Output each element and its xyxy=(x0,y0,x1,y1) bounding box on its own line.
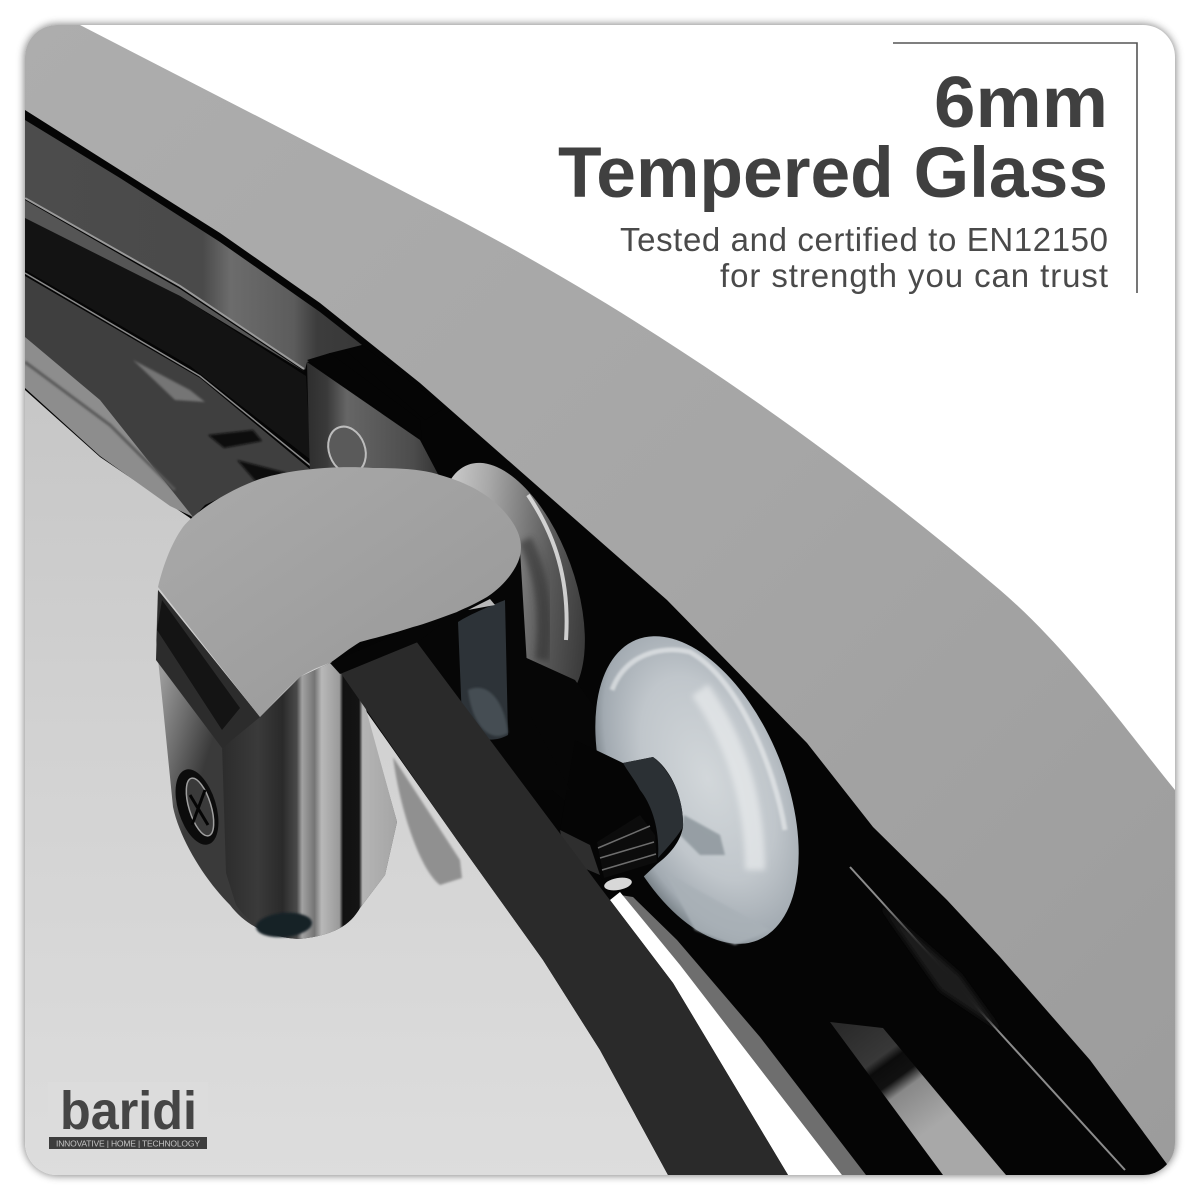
heading: Tempered Glass xyxy=(558,134,1108,213)
shower floor background xyxy=(25,380,725,1180)
rail reflection wedge xyxy=(133,360,205,402)
glass edge dark line xyxy=(25,362,175,490)
channel thin highlight line xyxy=(850,867,1125,1170)
logo: baridi: baridi xyxy=(60,1081,197,1141)
rail lower face xyxy=(25,276,311,518)
supporting text: for strength you can trust xyxy=(720,257,1108,294)
knob reflection on glass xyxy=(393,757,462,885)
glass edge strip xyxy=(25,337,193,517)
supporting text: Tested and certified to EN12150 xyxy=(620,221,1108,258)
face shine xyxy=(468,599,495,610)
heading xyxy=(558,63,1108,213)
logo: baridi: INNOVATIVE | HOME | TECHNOLOGY xyxy=(56,1138,200,1148)
black inner rail xyxy=(25,218,311,460)
channel dark upper sheen xyxy=(880,905,1000,1030)
frame lower lip xyxy=(25,200,305,372)
clamp screw hole xyxy=(176,769,218,845)
roller axle hub xyxy=(560,740,683,892)
matte black glass edge bar xyxy=(340,637,788,1175)
white reflection strip xyxy=(610,892,842,1175)
black lip under face xyxy=(330,637,417,674)
glass clamp body xyxy=(156,590,397,939)
callout corner rule xyxy=(893,43,1137,293)
rail dark reflections xyxy=(208,430,287,483)
upper frame face xyxy=(25,120,362,370)
clamp polished top face xyxy=(158,467,521,717)
grey rail strip xyxy=(620,895,866,1175)
frame highlight line xyxy=(25,198,304,369)
channel reflected strip xyxy=(830,1022,1006,1175)
front roller wheel xyxy=(595,636,799,946)
mounting bracket xyxy=(307,345,445,479)
glass clamp back body xyxy=(456,554,528,740)
dark block below rear roller xyxy=(526,658,578,708)
heading: 6mm xyxy=(934,63,1108,143)
rear clear roller xyxy=(452,462,585,683)
rail edge line xyxy=(25,273,311,466)
supporting text xyxy=(620,221,1108,294)
